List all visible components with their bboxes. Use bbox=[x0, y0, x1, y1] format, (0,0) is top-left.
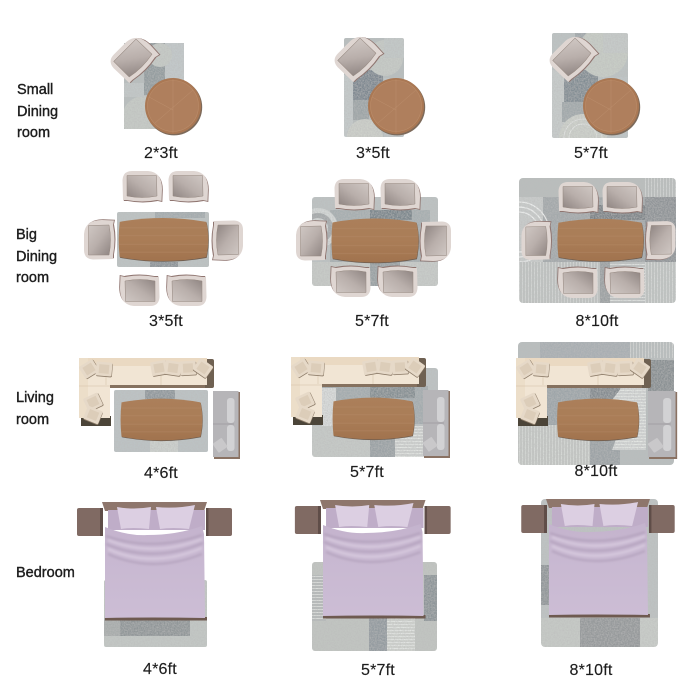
rug 8*10ft bbox=[518, 342, 674, 465]
table bbox=[557, 219, 644, 262]
scene: bedroom 4*6ft bbox=[77, 502, 232, 647]
rug 5*7ft bbox=[312, 562, 437, 651]
rug 4*6ft bbox=[104, 580, 207, 647]
row label: Big Dining room: room bbox=[16, 270, 49, 286]
scene: living room 8*10ft bbox=[516, 342, 677, 465]
chair bbox=[331, 30, 385, 84]
scene: big dining 3*5ft bbox=[84, 171, 243, 306]
row: living room bbox=[16, 342, 677, 482]
row label: Big Dining room: Dining bbox=[16, 249, 57, 265]
chair bbox=[107, 31, 161, 85]
row label: Living room: Living bbox=[16, 390, 54, 406]
round table bbox=[145, 78, 202, 135]
rug 8*10ft bbox=[519, 178, 676, 303]
table bbox=[557, 399, 639, 441]
row: bedroom bbox=[16, 499, 675, 679]
size label 4*6ft: 4*6ft bbox=[143, 661, 177, 678]
row label: Living room: room bbox=[16, 412, 49, 428]
scene: small dining 2*3ft bbox=[110, 38, 202, 136]
scene: bedroom 8*10ft bbox=[521, 499, 675, 647]
gray sofa bbox=[422, 390, 450, 458]
table bbox=[119, 218, 209, 262]
scene: small dining 5*7ft bbox=[550, 33, 640, 138]
sectional sofa bbox=[79, 358, 214, 426]
rug 5*7ft bbox=[298, 197, 438, 286]
bed with nightstands bbox=[521, 499, 675, 618]
round table bbox=[368, 78, 425, 135]
rug 4*6ft bbox=[114, 390, 208, 452]
bed with nightstands bbox=[77, 502, 232, 620]
size label 5*7ft: 5*7ft bbox=[350, 464, 384, 481]
scene: small dining 3*5ft bbox=[334, 36, 426, 137]
bed with nightstands bbox=[295, 500, 451, 618]
scene: bedroom 5*7ft bbox=[295, 500, 451, 651]
row label: Small Dining room: Dining bbox=[17, 104, 58, 120]
size label 5*7ft: 5*7ft bbox=[574, 145, 608, 162]
size label 4*6ft: 4*6ft bbox=[144, 465, 178, 482]
size label 8*10ft: 8*10ft bbox=[569, 662, 613, 679]
size label 3*5ft: 3*5ft bbox=[356, 145, 390, 162]
sectional sofa bbox=[516, 358, 651, 426]
row: big dining room bbox=[16, 171, 676, 330]
table bbox=[332, 218, 419, 263]
size label 2*3ft: 2*3ft bbox=[144, 145, 178, 162]
size label 8*10ft: 8*10ft bbox=[574, 463, 618, 480]
size label 5*7ft: 5*7ft bbox=[361, 662, 395, 679]
rug 2*3ft bbox=[124, 43, 184, 129]
chair bbox=[546, 30, 600, 84]
size label 5*7ft: 5*7ft bbox=[355, 313, 389, 330]
row label: Small Dining room: Small bbox=[17, 82, 53, 98]
rug 5*7ft bbox=[552, 33, 628, 138]
row: small dining room bbox=[17, 27, 640, 162]
row label: Bedroom: Bedroom bbox=[16, 565, 75, 581]
scene: big dining 5*7ft bbox=[296, 179, 451, 297]
gray sofa bbox=[212, 391, 240, 459]
rug 8*10ft bbox=[541, 499, 658, 647]
size label 3*5ft: 3*5ft bbox=[149, 313, 183, 330]
chairs bbox=[521, 182, 676, 298]
chairs bbox=[296, 179, 451, 297]
scene: living room 4*6ft bbox=[79, 358, 240, 459]
rug 3*5ft bbox=[344, 38, 404, 137]
row label: Big Dining room: Big bbox=[16, 227, 37, 243]
scene: living room 5*7ft bbox=[291, 357, 450, 458]
rug 3*5ft bbox=[117, 212, 209, 267]
gray sofa bbox=[647, 391, 677, 459]
table bbox=[333, 398, 415, 440]
rug 5*7ft bbox=[312, 368, 438, 457]
sectional sofa bbox=[291, 357, 426, 425]
table bbox=[121, 399, 203, 441]
size label 8*10ft: 8*10ft bbox=[575, 313, 619, 330]
chairs bbox=[84, 171, 243, 306]
round table bbox=[583, 78, 640, 135]
scene: big dining 8*10ft bbox=[519, 178, 676, 303]
row label: Small Dining room: room bbox=[17, 125, 50, 141]
